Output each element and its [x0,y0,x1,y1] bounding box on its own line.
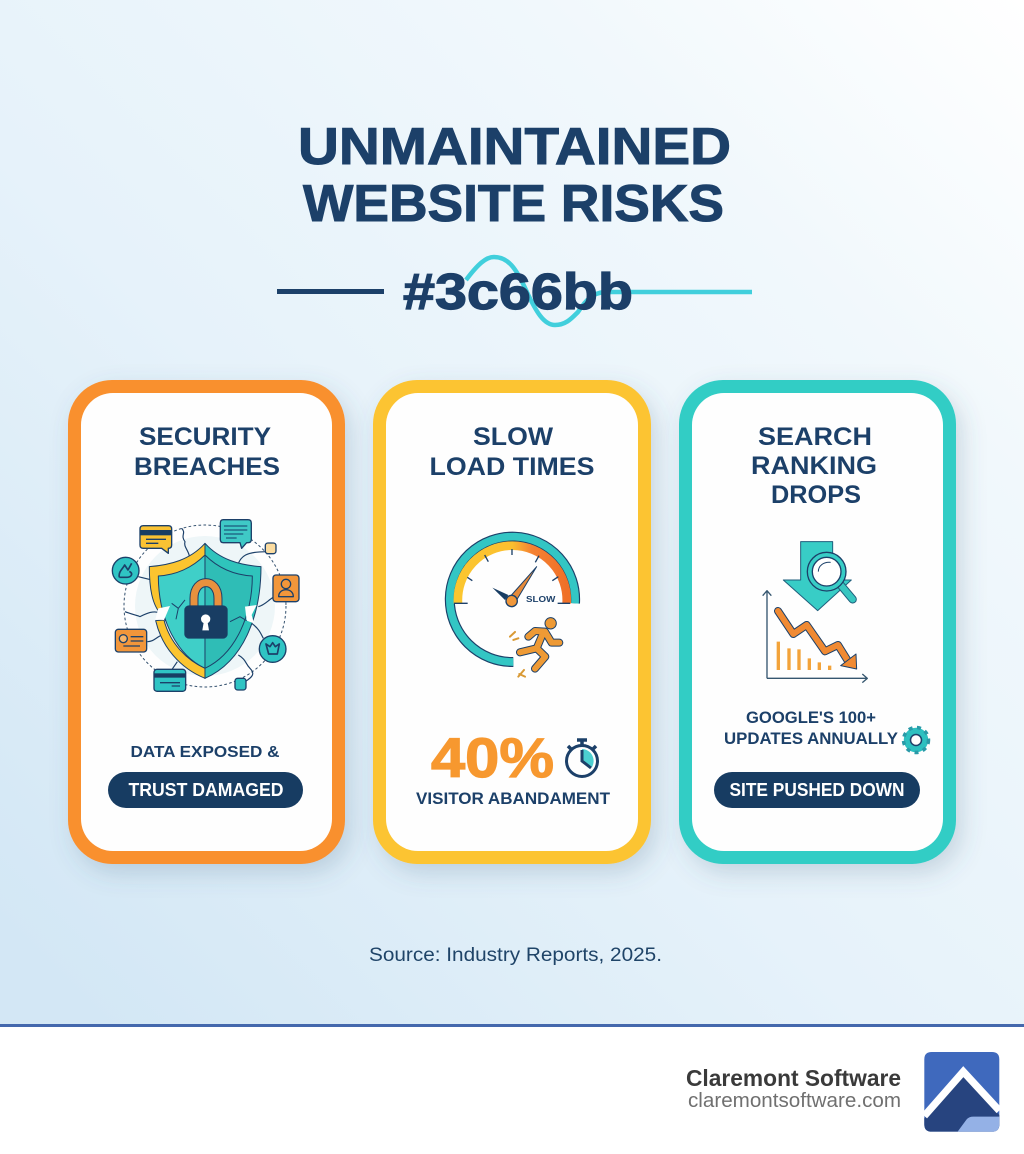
icon: speedometer with runner [450,537,575,677]
title: WEBSITE RISKS [303,175,724,233]
caption: visitor abandament: VISITOR ABANDAMENT [416,790,610,808]
heading: slow load times [430,423,594,481]
brand name: Claremont Software [686,1065,901,1091]
caption: google updates: UPDATES ANNUALLY [724,730,898,748]
badge: site pushed down [714,772,920,808]
caption: google updates [724,709,898,748]
stat: 40%: 40% [431,726,554,789]
heading: security breaches [134,423,280,481]
icon: shield with padlock and data nodes [112,520,299,691]
badge: trust damaged: TRUST DAMAGED [128,780,284,800]
footer [0,1024,1024,1154]
panel: slow load times [373,380,651,864]
icon: stopwatch [566,740,598,776]
subtitle with wave divider: #3c66bb [403,263,633,320]
caption: google updates: GOOGLE'S 100+ [746,709,876,727]
heading: search ranking drops: RANKING [751,452,877,480]
title [298,118,731,233]
source note: Source: Industry Reports, 2025. [369,945,662,966]
icon: speedometer with runner: SLOW [526,594,556,604]
icon: falling rank chart with magnifier [763,542,867,683]
heading: search ranking drops [751,423,877,509]
caption: data exposed: DATA EXPOSED & [130,744,280,761]
panel: security breaches [68,380,345,864]
subtitle with wave divider [277,257,752,325]
title: UNMAINTAINED [298,118,731,176]
heading: slow load times: LOAD TIMES [430,453,594,481]
heading: security breaches: BREACHES [134,453,280,481]
brand url: claremontsoftware.com [688,1090,901,1112]
logo [924,1052,999,1132]
panel: search ranking drops [679,380,956,864]
heading: search ranking drops: SEARCH [758,423,872,451]
heading: search ranking drops: DROPS [771,481,861,509]
badge: trust damaged [108,772,303,808]
heading: security breaches: SECURITY [139,423,271,451]
badge: site pushed down: SITE PUSHED DOWN [730,780,904,800]
icon: gear [904,728,928,752]
heading: slow load times: SLOW [473,423,553,451]
